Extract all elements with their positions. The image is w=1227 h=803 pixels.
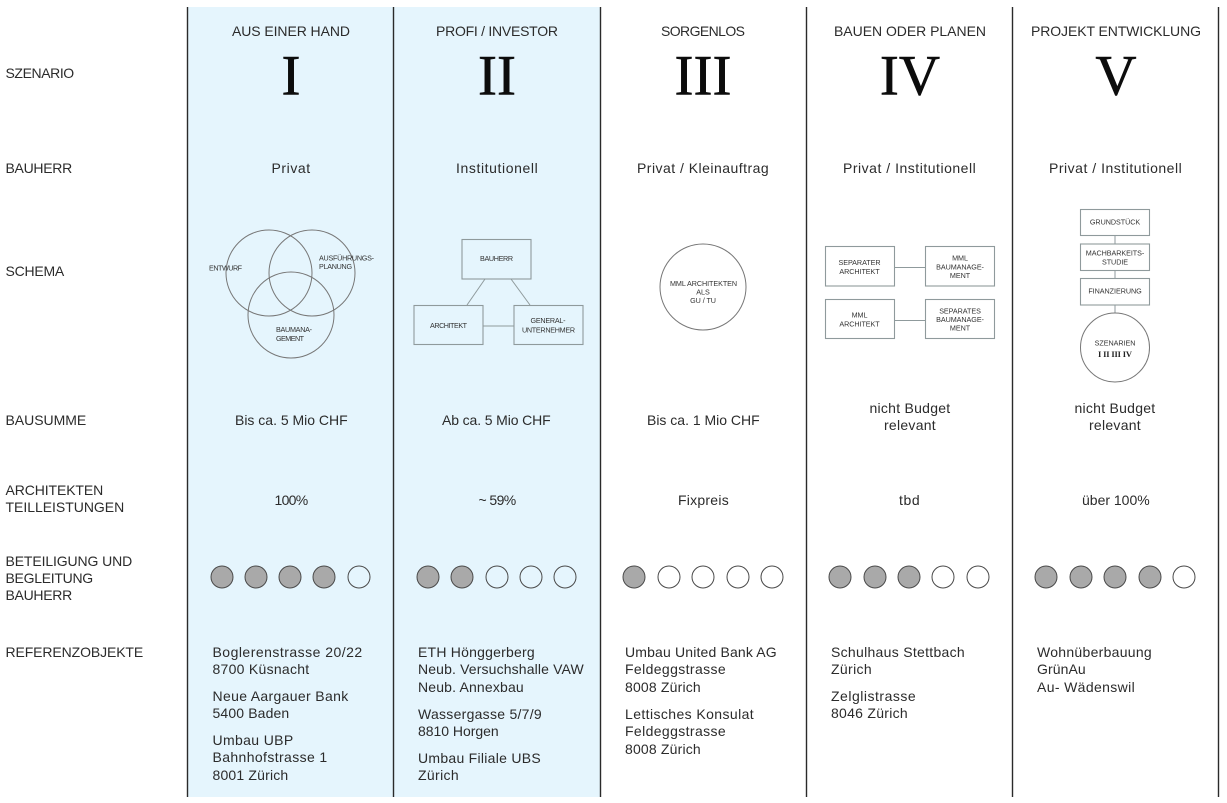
row labels: BETEILIGUNG UND [6, 553, 132, 569]
column headings: SORGENLOS [661, 23, 745, 39]
references I: Boglerenstrasse 20/22 [212, 644, 362, 660]
teilleistungen row: über 100% [1082, 492, 1150, 508]
schema I: venn diagram: PLANUNG [319, 262, 352, 271]
schema III: circle: ALS [696, 288, 710, 296]
references V: Wohnüberbauung [1037, 644, 1152, 660]
schema V: stacked boxes and circle [1080, 210, 1150, 382]
participation dots III: 1 of 5 [623, 566, 783, 588]
references I: Neue Aargauer Bank [212, 688, 349, 704]
bauherr row: Institutionell [456, 160, 538, 176]
participation dots V: 4 of 5 [1035, 566, 1195, 588]
participation dots IV: 3 of 5 [829, 566, 989, 588]
references II: Neub. Versuchshalle VAW [418, 661, 584, 677]
roman numerals: V [1095, 44, 1137, 108]
participation dots II: 2 of 5 [417, 566, 576, 588]
roman numerals: IV [880, 44, 940, 108]
row labels: ARCHITEKTEN [6, 482, 104, 498]
schema V: stacked boxes and circle: MACHBARKEITS- [1086, 249, 1145, 258]
schema IV: paired boxes: ARCHITEKT [839, 319, 880, 328]
bauherr row: Privat / Kleinauftrag [637, 160, 769, 176]
bausumme row: relevant [1089, 417, 1141, 433]
bausumme row [235, 400, 1156, 433]
references I: 8001 Zürich [212, 767, 288, 783]
references V [1037, 644, 1152, 695]
references II: Umbau Filiale UBS [418, 750, 541, 766]
schema IV: paired boxes: MML [952, 254, 968, 263]
references III: 8008 Zürich [625, 741, 701, 757]
references II [418, 644, 584, 783]
column headings [232, 23, 1201, 39]
schema IV: paired boxes: BAUMANAGE- [936, 262, 985, 271]
row labels: BAUHERR [6, 160, 72, 176]
references I: 5400 Baden [212, 705, 290, 721]
column headings: BAUEN ODER PLANEN [834, 23, 986, 39]
schema II: triangle of boxes: BAUHERR [480, 254, 513, 263]
schema IV: paired boxes [826, 246, 994, 338]
highlighted columns background [188, 7, 600, 797]
bausumme row: nicht Budget [1074, 400, 1156, 416]
schema I: venn diagram [209, 230, 375, 358]
schema V: stacked boxes and circle: STUDIE [1102, 258, 1128, 267]
roman numerals: II [478, 44, 516, 108]
schema II: triangle of boxes: GENERAL- [530, 316, 566, 325]
schema III: circle: MML ARCHITEKTEN [670, 279, 737, 288]
references II: Neub. Annexbau [418, 679, 524, 695]
row labels: TEILLEISTUNGEN [6, 499, 124, 515]
column headings: PROFI / INVESTOR [436, 23, 558, 39]
schema V: stacked boxes and circle: FINANZIERUNG [1088, 287, 1142, 296]
references II: Wassergasse 5/7/9 [418, 706, 542, 722]
schema IV: paired boxes: MENT [950, 324, 971, 333]
references III: Umbau United Bank AG [625, 644, 777, 660]
references III: Feldeggstrasse [625, 661, 726, 677]
schema IV: paired boxes: SEPARATER [838, 258, 881, 267]
schema V: stacked boxes and circle: I II III IV [1098, 349, 1133, 359]
schema IV: paired boxes: MML [852, 310, 867, 319]
references IV: Schulhaus Stettbach [831, 644, 965, 660]
row labels: BAUHERR [6, 587, 72, 603]
references II: Zürich [418, 767, 459, 783]
bauherr row [272, 160, 1182, 176]
bauherr row: Privat [272, 160, 310, 176]
bauherr row: Privat / Institutionell [1049, 160, 1182, 176]
references III: Lettisches Konsulat [625, 706, 754, 722]
roman numerals: III [675, 44, 731, 108]
column headings: AUS EINER HAND [232, 23, 350, 39]
schema I: venn diagram: BAUMANA- [276, 325, 313, 334]
teilleistungen row: tbd [899, 492, 920, 508]
references II: ETH Hönggerberg [418, 644, 535, 660]
references V: GrünAu [1037, 661, 1086, 677]
teilleistungen row: ~ 59% [478, 492, 516, 508]
references II: 8810 Horgen [418, 723, 499, 739]
schema IV: paired boxes: SEPARATES [939, 306, 981, 315]
references IV: Zelglistrasse [831, 688, 916, 704]
teilleistungen row: Fixpreis [678, 492, 729, 508]
participation dots I: 4 of 5 [211, 566, 370, 588]
teilleistungen row [274, 492, 1150, 508]
schema I: venn diagram: GEMENT [276, 334, 305, 343]
bausumme row: Bis ca. 1 Mio CHF [647, 412, 760, 428]
schema II: triangle of boxes: ARCHITEKT [430, 321, 468, 330]
references I: Bahnhofstrasse 1 [212, 749, 328, 765]
row labels: SZENARIO [6, 65, 74, 81]
references I [212, 644, 362, 783]
bauherr row: Privat / Institutionell [843, 160, 976, 176]
row labels [6, 65, 144, 660]
schema III: circle: GU / TU [690, 296, 716, 305]
schema I: venn diagram: AUSFÜHRUNGS- [319, 254, 375, 263]
bausumme row: relevant [884, 417, 936, 433]
bausumme row: Ab ca. 5 Mio CHF [442, 412, 551, 428]
references III [625, 644, 777, 757]
references IV [831, 644, 965, 721]
schema IV: paired boxes: MENT [950, 271, 971, 280]
roman numerals: I [282, 44, 300, 108]
teilleistungen row: 100% [274, 492, 308, 508]
row labels: REFERENZOBJEKTE [6, 644, 144, 660]
references I: Umbau UBP [212, 732, 294, 748]
bausumme row: Bis ca. 5 Mio CHF [235, 412, 348, 428]
row labels: BEGLEITUNG [6, 570, 94, 586]
references I: 8700 Küsnacht [212, 661, 310, 677]
references IV: 8046 Zürich [831, 705, 908, 721]
schema I: venn diagram: ENTWURF [209, 264, 243, 273]
references IV: Zürich [831, 661, 872, 677]
row labels: BAUSUMME [6, 412, 86, 428]
references V: Au- Wädenswil [1037, 679, 1135, 695]
roman numerals [282, 44, 1137, 108]
schema V: stacked boxes and circle: GRUNDSTÜCK [1090, 218, 1140, 227]
schema III: circle [660, 244, 746, 330]
schema IV: paired boxes: ARCHITEKT [839, 267, 880, 276]
schema II: triangle of boxes: UNTERNEHMER [522, 326, 575, 334]
schema V: stacked boxes and circle: SZENARIEN [1095, 338, 1135, 348]
references III: Feldeggstrasse [625, 723, 726, 739]
bausumme row: nicht Budget [870, 400, 950, 416]
schema IV: paired boxes: BAUMANAGE- [936, 315, 985, 324]
references III: 8008 Zürich [625, 679, 701, 695]
column headings: PROJEKT ENTWICKLUNG [1031, 23, 1201, 39]
schema II: triangle of boxes [414, 240, 583, 344]
row labels: SCHEMA [6, 263, 65, 279]
